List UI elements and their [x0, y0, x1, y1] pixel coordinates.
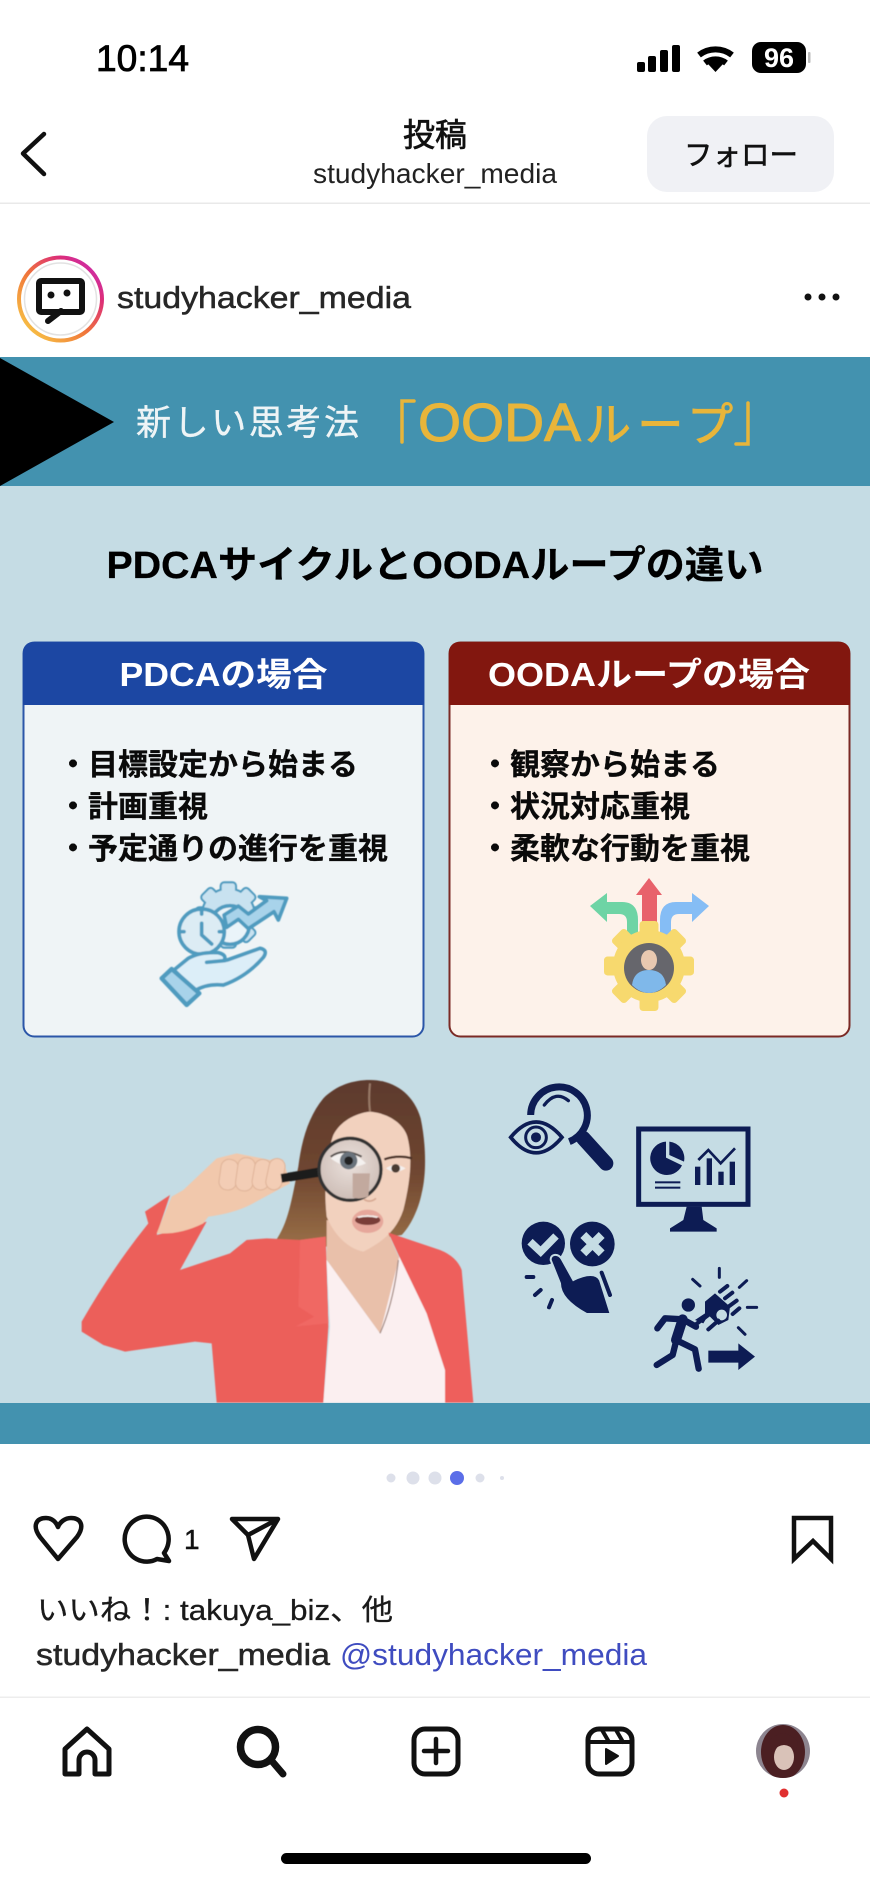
battery 96	[752, 42, 810, 73]
OODA list	[480, 749, 750, 866]
banner highlighted title	[402, 393, 748, 453]
icon: create post	[414, 1729, 458, 1774]
OODA header	[449, 642, 850, 705]
battery 96: 96	[764, 43, 794, 73]
neck	[327, 1220, 399, 1333]
mouth	[352, 1210, 383, 1233]
panel: OODA	[449, 642, 850, 1036]
OODA list: ・状況対応重視	[480, 791, 690, 824]
icon: search	[240, 1730, 283, 1774]
signal icon	[637, 45, 680, 72]
follow button	[647, 116, 834, 192]
OODA header: OODAループの場合	[488, 656, 810, 693]
icon: observe, eye and magnifier	[511, 1087, 606, 1163]
PDCA list: ・計画重視	[58, 791, 208, 824]
caption mention: @studyhacker_media	[340, 1637, 648, 1672]
hair part highlight	[366, 1083, 373, 1112]
PDCA header	[23, 642, 424, 705]
icons: OODA steps	[511, 1087, 757, 1370]
comment count: 1	[184, 1524, 200, 1555]
hand	[157, 1153, 290, 1234]
profile avatar	[19, 258, 102, 340]
magnifier lens	[319, 1138, 381, 1200]
status bar	[96, 38, 810, 79]
icon: send	[232, 1519, 278, 1559]
icon: orient, monitor with charts	[639, 1129, 748, 1232]
back chevron	[23, 134, 44, 174]
OODA list: ・観察から始まる	[480, 749, 720, 782]
carousel dots	[386, 1471, 504, 1485]
header username: studyhacker_media	[313, 158, 558, 189]
PDCA list: ・予定通りの進行を重視	[58, 833, 388, 866]
fingers	[218, 1157, 287, 1192]
top banner	[0, 357, 870, 486]
blouse	[323, 1257, 445, 1403]
magnifier handle	[281, 1167, 321, 1183]
clock: 10:14	[96, 38, 189, 79]
hair	[275, 1080, 425, 1247]
slide panel background	[0, 486, 870, 1403]
username: studyhacker_media	[117, 280, 412, 315]
icon: home	[65, 1729, 109, 1774]
bottom tab bar	[65, 1729, 632, 1774]
post action icons	[36, 1517, 831, 1562]
banner subtitle: 新しい思考法	[136, 404, 359, 443]
right eye and brow	[386, 1165, 406, 1172]
PDCA header: PDCAの場合	[120, 656, 328, 693]
woman with magnifying glass	[82, 1080, 473, 1403]
icon: comment	[125, 1517, 169, 1562]
caption line	[36, 1637, 648, 1672]
home indicator	[281, 1853, 591, 1864]
icon: bookmark	[794, 1518, 831, 1559]
icon: hand holding gear, clock and arrow	[162, 883, 287, 1005]
likes line: いいね！: takuya_biz、他	[37, 1594, 393, 1627]
icon: heart	[36, 1518, 81, 1559]
jacket	[82, 1195, 328, 1403]
face	[325, 1112, 410, 1252]
OODA list: ・柔軟な行動を重視	[480, 833, 750, 866]
caption author: studyhacker_media	[36, 1637, 331, 1672]
icon: act, runner with fist and arrow	[657, 1268, 757, 1370]
post author row	[19, 258, 840, 340]
banner highlighted title: OODA	[418, 393, 581, 453]
PDCA list: ・目標設定から始まる	[58, 749, 358, 782]
icon: reels	[588, 1729, 632, 1774]
icon: decide, check and cross with finger	[522, 1222, 615, 1314]
header title: 投稿	[403, 117, 467, 153]
banner highlighted title: ループ	[585, 399, 733, 451]
slide heading: PDCAサイクルとOODAループの違い	[106, 545, 764, 587]
bottom bar of slide	[0, 1403, 870, 1444]
panel: PDCA	[23, 642, 424, 1036]
notification dot	[780, 1788, 788, 1798]
black triangle	[0, 358, 114, 486]
PDCA list	[58, 749, 388, 866]
wifi icon	[699, 49, 732, 72]
profile avatar tab	[756, 1724, 810, 1798]
icon: gear with person and three arrows	[590, 878, 709, 1011]
jacket lapel	[295, 1237, 328, 1327]
nose shadow	[364, 1198, 376, 1201]
follow button: フォロー	[684, 140, 798, 172]
navigation header	[23, 116, 834, 192]
more menu	[804, 294, 840, 300]
